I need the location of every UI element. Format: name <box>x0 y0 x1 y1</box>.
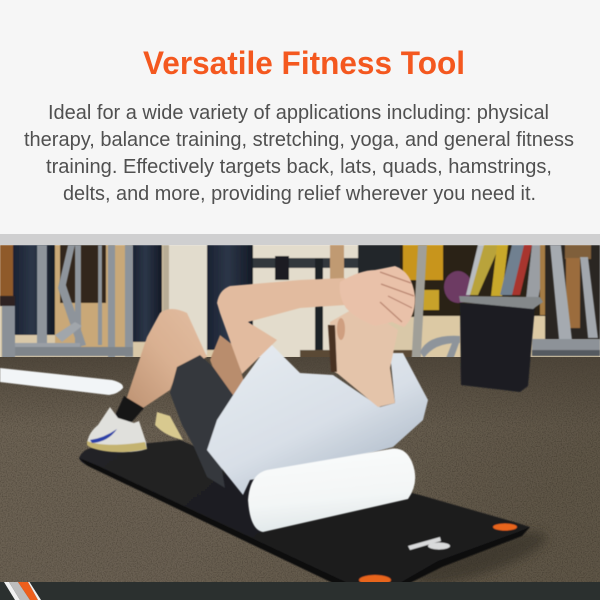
far leg <box>210 335 245 398</box>
neck and head <box>330 305 398 407</box>
gym background <box>0 245 600 360</box>
grey t-shirt <box>207 343 428 495</box>
description text: Ideal for a wide variety of applications including: physical <box>48 102 549 124</box>
orange mat corner peg <box>493 524 517 530</box>
upper arm <box>217 278 345 374</box>
panel: text header <box>0 0 600 234</box>
photo: man on foam roller in gym <box>0 245 600 595</box>
clasped hands <box>340 266 415 327</box>
dark shorts <box>170 354 234 488</box>
description text: delts, and more, providing relief wherever you need it. <box>63 183 536 205</box>
title: Versatile Fitness Tool <box>143 45 465 81</box>
footer stripes <box>4 582 41 600</box>
footer bar <box>0 582 600 600</box>
large white foam roller <box>248 449 415 532</box>
window with coloured bands <box>400 245 548 317</box>
description text: therapy, balance training, stretching, yoga, and general fitness <box>24 129 574 151</box>
gym equipment frames <box>0 245 600 357</box>
beard <box>328 325 337 372</box>
near leg <box>125 309 207 408</box>
ear <box>337 318 345 340</box>
black trash bin <box>459 296 543 392</box>
near shoe <box>87 407 147 452</box>
grey divider band <box>0 234 600 245</box>
orange mat corner peg <box>358 574 392 582</box>
description text: training. Effectively targets back, lats, quads, hamstrings, <box>46 156 552 178</box>
small foam roller on floor <box>0 368 123 395</box>
hair <box>372 309 397 322</box>
exercise mat <box>79 440 530 585</box>
far shoe <box>155 412 183 440</box>
brand logo on mat <box>408 537 450 550</box>
black sock <box>113 396 144 424</box>
person lying on roller <box>87 266 428 495</box>
gym floor <box>0 357 600 595</box>
description text <box>24 102 574 205</box>
